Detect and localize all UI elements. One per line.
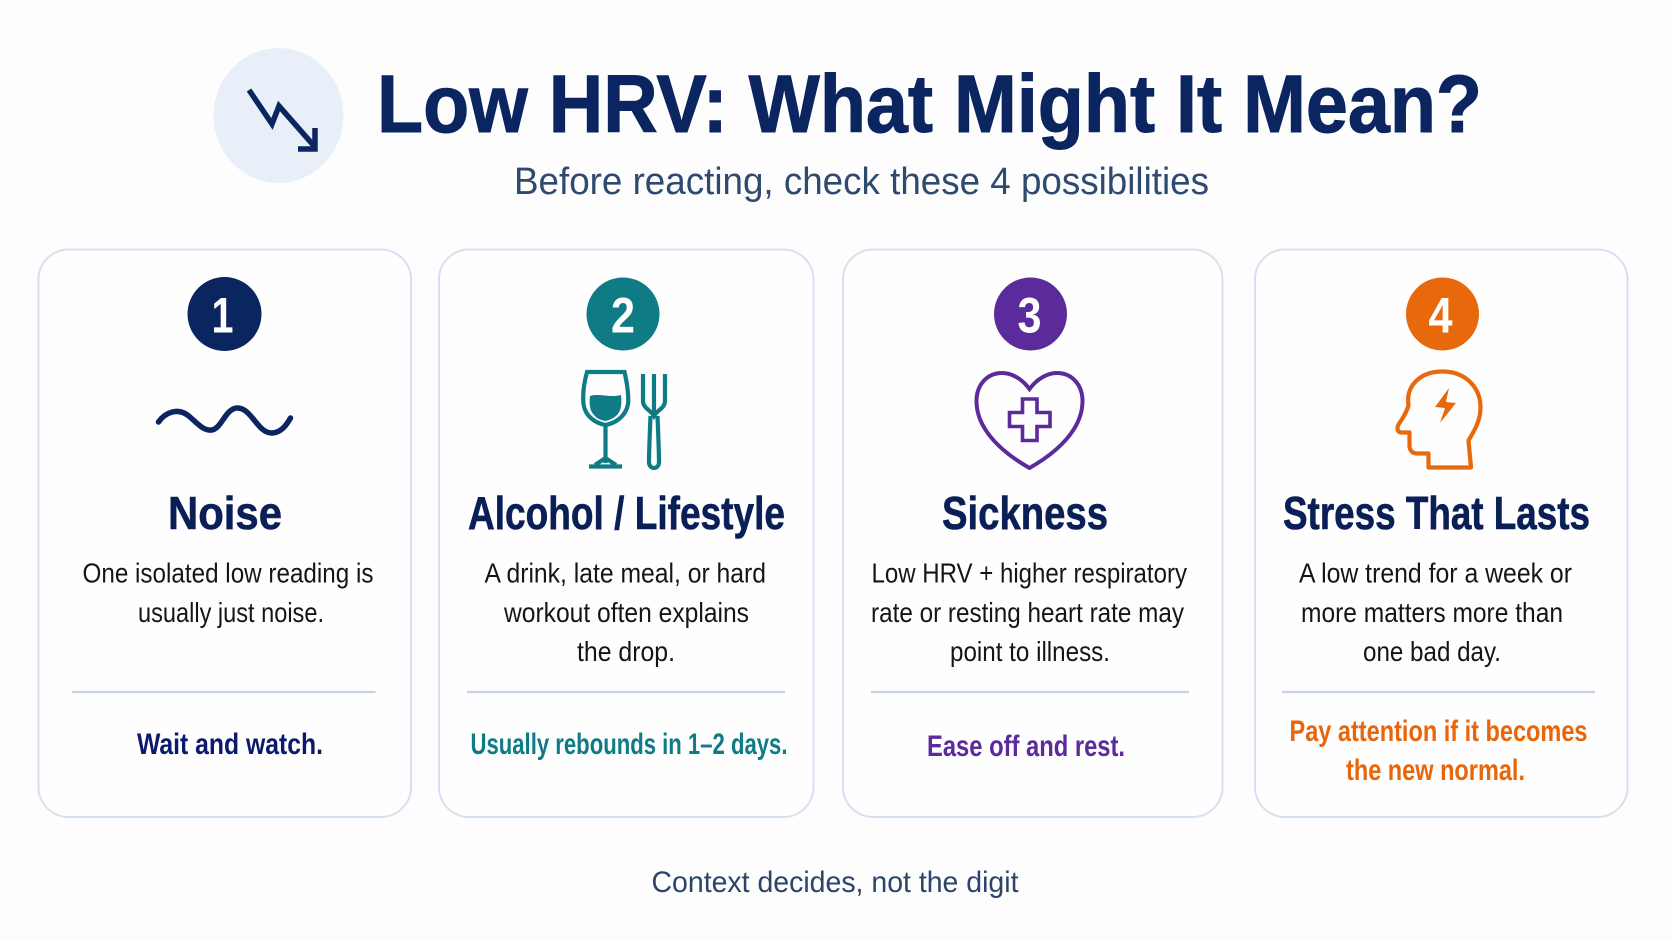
- description: [871, 558, 1187, 667]
- heading: Noise: [168, 487, 282, 539]
- panel: alcohol and lifestyle: [439, 250, 814, 817]
- description: rate or resting heart rate may: [871, 597, 1184, 628]
- icon: head with lightning bolt: [1398, 372, 1480, 468]
- takeaway: Usually rebounds in 1–2 days.: [470, 728, 788, 761]
- panel: sickness: [843, 250, 1222, 817]
- takeaway: [1290, 715, 1588, 787]
- heading: Sickness: [942, 487, 1108, 539]
- icon: wine glass and fork: [583, 372, 665, 468]
- heading: Alcohol / Lifestyle: [468, 487, 785, 539]
- heading: Stress That Lasts: [1283, 487, 1590, 539]
- panel: noise: [38, 250, 411, 817]
- number badge 3: [994, 278, 1067, 350]
- number badge 3: 3: [1018, 288, 1042, 344]
- description: [484, 558, 766, 667]
- subtitle: Before reacting, check these 4 possibilities: [514, 161, 1209, 203]
- icon: noise wave: [158, 408, 290, 433]
- icon: heart with medical cross: [976, 373, 1082, 468]
- description: A drink, late meal, or hard: [484, 558, 766, 588]
- panel: stress that lasts: [1255, 250, 1628, 817]
- footer note: Context decides, not the digit: [652, 866, 1019, 899]
- number badge 4: [1406, 278, 1479, 350]
- description: workout often explains: [503, 597, 749, 628]
- icon: falling trend arrow: [214, 48, 344, 183]
- header: [214, 48, 1482, 203]
- takeaway: Pay attention if it becomes: [1290, 715, 1588, 748]
- takeaway: Ease off and rest.: [927, 730, 1125, 763]
- number badge 2: [586, 278, 660, 350]
- takeaway: the new normal.: [1346, 754, 1525, 787]
- description: A low trend for a week or: [1299, 558, 1572, 588]
- description: point to illness.: [950, 636, 1110, 667]
- title: Low HRV: What Might It Mean?: [377, 59, 1482, 150]
- description: the drop.: [577, 636, 675, 667]
- number badge 4: 4: [1428, 288, 1453, 344]
- number badge 1: [188, 277, 262, 351]
- description: one bad day.: [1363, 636, 1501, 667]
- description: usually just noise.: [138, 597, 324, 628]
- description: [82, 558, 374, 628]
- description: One isolated low reading is: [82, 558, 374, 588]
- description: more matters more than: [1301, 597, 1563, 628]
- number badge 1: 1: [212, 288, 234, 344]
- description: Low HRV + higher respiratory: [872, 558, 1187, 588]
- takeaway: Wait and watch.: [137, 728, 323, 761]
- description: [1299, 558, 1572, 667]
- number badge 2: 2: [611, 288, 635, 344]
